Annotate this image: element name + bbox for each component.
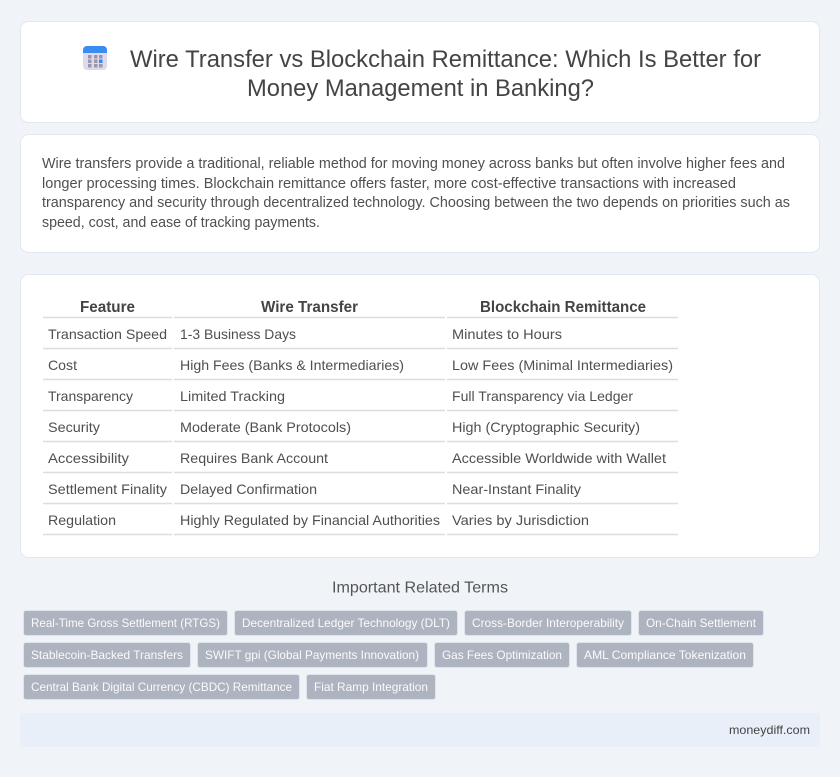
- row: cost: Cost: [48, 357, 77, 373]
- text block: intro: Wire transfers provide a traditional, reliable method for moving money across banks but often involve higher fees and: [42, 156, 785, 172]
- row: transparency: Limited Tracking: [180, 388, 285, 404]
- row: regulation: Regulation: [48, 512, 116, 528]
- footer bar: [20, 713, 820, 747]
- text block: intro: [42, 156, 790, 231]
- row: accessibility: [48, 450, 666, 466]
- text block: intro: speed, cost, and ease of tracking payments.: [42, 215, 320, 231]
- related terms tags: Stablecoin-Backed Transfers: [31, 648, 183, 662]
- panel: header: [20, 22, 820, 122]
- row: transaction speed: Minutes to Hours: [452, 326, 562, 342]
- row: settlement finality: [48, 481, 581, 497]
- table grid lines: [43, 318, 678, 534]
- row: settlement finality: Near-Instant Finality: [452, 481, 581, 497]
- row: security: High (Cryptographic Security): [452, 419, 640, 435]
- related terms tags: [24, 610, 764, 700]
- row: accessibility: Requires Bank Account: [180, 450, 328, 466]
- row: regulation: Highly Regulated by Financial Authorities: [180, 512, 440, 528]
- row: cost: [48, 357, 673, 373]
- row: transaction speed: Transaction Speed: [48, 326, 167, 342]
- row: security: Security: [48, 419, 100, 435]
- title: Money Management in Banking?: [247, 75, 594, 102]
- row: transparency: Transparency: [48, 388, 133, 404]
- row: settlement finality: Settlement Finality: [48, 481, 167, 497]
- related terms tags: AML Compliance Tokenization: [584, 648, 746, 662]
- row: transparency: Full Transparency via Ledger: [452, 388, 633, 404]
- related terms tags: Decentralized Ledger Technology (DLT): [242, 616, 450, 630]
- row: cost: Low Fees (Minimal Intermediaries): [452, 357, 673, 373]
- related terms tags: On-Chain Settlement: [646, 616, 757, 630]
- row: security: [48, 419, 640, 435]
- row: cost: High Fees (Banks & Intermediaries): [180, 357, 404, 373]
- table header row: Wire Transfer: [261, 299, 358, 316]
- related terms tags: Real-Time Gross Settlement (RTGS): [31, 616, 220, 630]
- panel: comparison table: [20, 274, 820, 558]
- row: regulation: Varies by Jurisdiction: [452, 512, 589, 528]
- related terms tags: Gas Fees Optimization: [442, 648, 562, 662]
- panel: intro paragraph: [20, 134, 820, 252]
- table header row: Blockchain Remittance: [480, 299, 646, 316]
- row: accessibility: Accessible Worldwide with Wallet: [452, 450, 666, 466]
- row: transaction speed: [48, 326, 562, 342]
- row: settlement finality: Delayed Confirmation: [180, 481, 317, 497]
- row: transaction speed: 1-3 Business Days: [180, 326, 296, 342]
- text block: intro: transparency and security through decentralized technology. Choosing between the two depends on priorities such as: [42, 195, 790, 211]
- table header row: [80, 299, 646, 316]
- row: accessibility: Accessibility: [48, 450, 129, 466]
- row: regulation: [48, 512, 589, 528]
- icon: calendar: [83, 46, 107, 70]
- row: security: Moderate (Bank Protocols): [180, 419, 351, 435]
- footer credit: moneydiff.com: [729, 723, 810, 737]
- related terms tags: Cross-Border Interoperability: [472, 616, 624, 630]
- title: [130, 46, 761, 102]
- related terms tags: Central Bank Digital Currency (CBDC) Remittance: [31, 680, 292, 694]
- related terms tags: Fiat Ramp Integration: [314, 680, 428, 694]
- heading: related terms: Important Related Terms: [332, 580, 508, 596]
- text block: intro: longer processing times. Blockchain remittance offers faster, more cost-effective transactions with increased: [42, 176, 736, 192]
- title: Wire Transfer vs Blockchain Remittance: Which Is Better for: [130, 46, 761, 73]
- row: transparency: [48, 388, 633, 404]
- related terms tags: SWIFT gpi (Global Payments Innovation): [205, 648, 419, 662]
- table header row: Feature: [80, 299, 135, 316]
